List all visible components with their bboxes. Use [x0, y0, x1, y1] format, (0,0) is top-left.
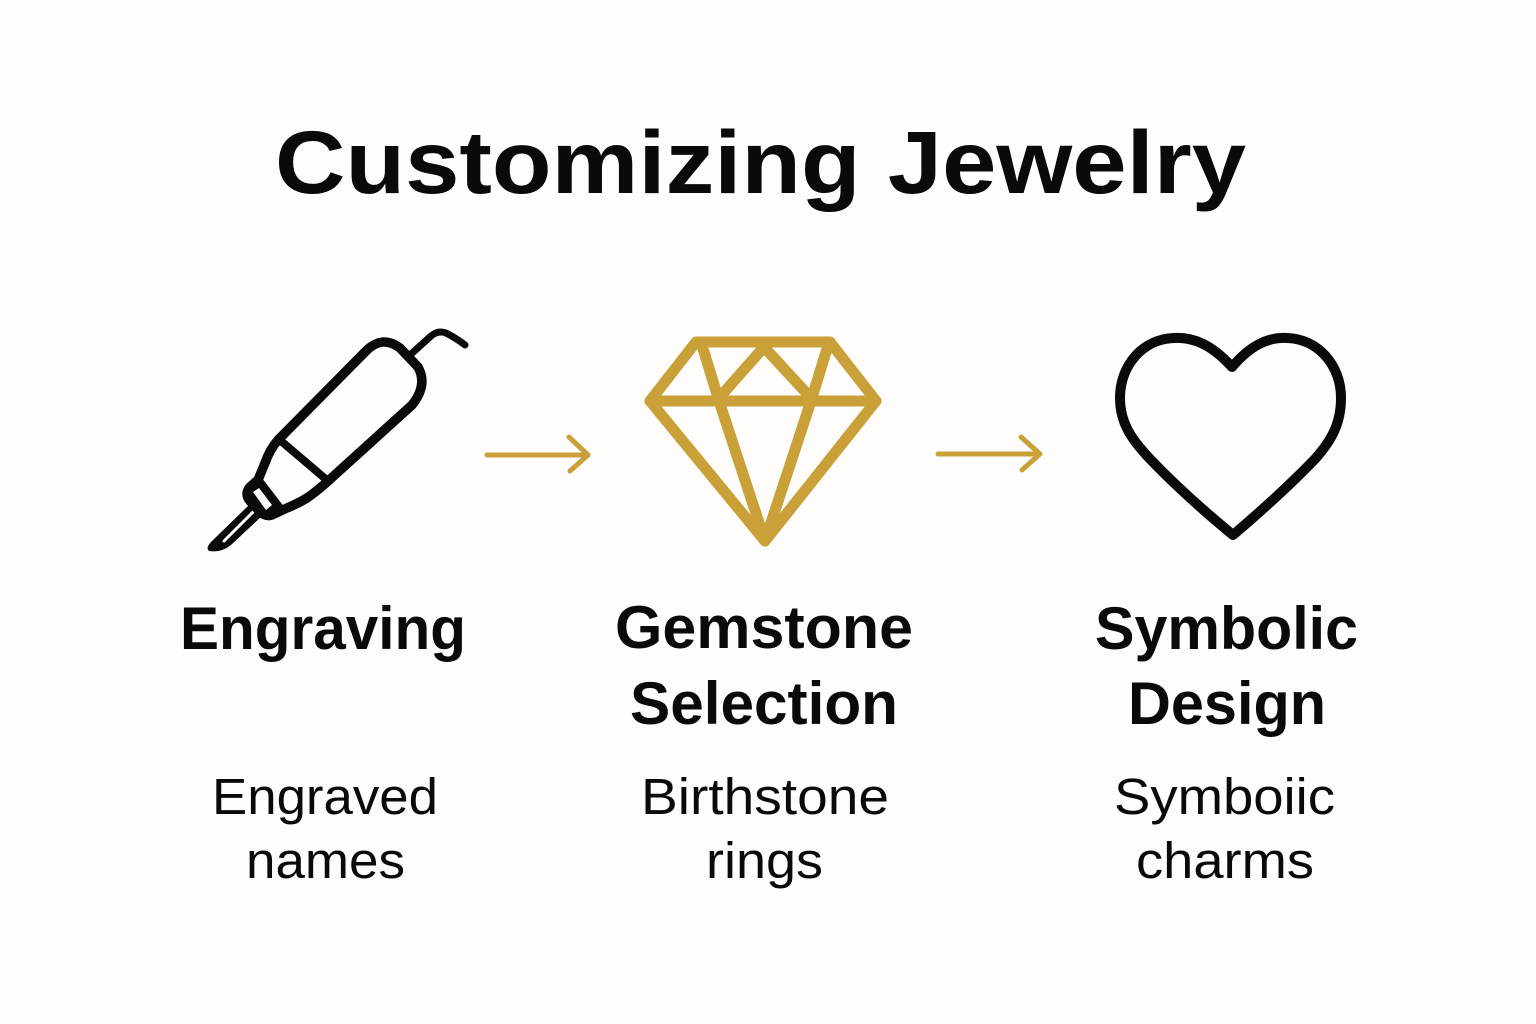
- description: Engraved names: [212, 768, 438, 889]
- description: Engraved names: Engraved: [212, 768, 438, 825]
- heading: Gemstone Selection: Gemstone: [615, 594, 913, 661]
- icon: heart: [1120, 338, 1341, 535]
- description: Symboiic charms: charms: [1136, 832, 1314, 889]
- title: Customizing Jewelry: [275, 112, 1247, 212]
- description: Symboiic charms: Symboiic: [1114, 768, 1335, 825]
- icon: diamond: [650, 342, 876, 541]
- description: Birthstone rings: rings: [706, 832, 823, 889]
- description: Engraved names: names: [246, 832, 405, 889]
- heading: Gemstone Selection: Selection: [630, 670, 898, 737]
- heading: Symbolic Design: [1095, 595, 1358, 737]
- heading: Symbolic Design: Symbolic: [1095, 595, 1358, 662]
- icon: engraving tool: [208, 332, 465, 551]
- panel: symbolic design: [1095, 338, 1358, 889]
- description: Symboiic charms: [1114, 768, 1335, 889]
- description: Birthstone rings: Birthstone: [641, 768, 889, 825]
- panel: gemstone selection: [615, 342, 913, 889]
- panel: engraving: [180, 332, 466, 889]
- heading: Gemstone Selection: [615, 594, 913, 737]
- arrow: gemstone to symbolic design: [938, 437, 1040, 470]
- heading: Symbolic Design: Design: [1128, 670, 1326, 737]
- heading: Engraving: Engraving: [180, 595, 466, 662]
- arrow: engraving to gemstone: [487, 437, 588, 471]
- description: Birthstone rings: [641, 768, 889, 889]
